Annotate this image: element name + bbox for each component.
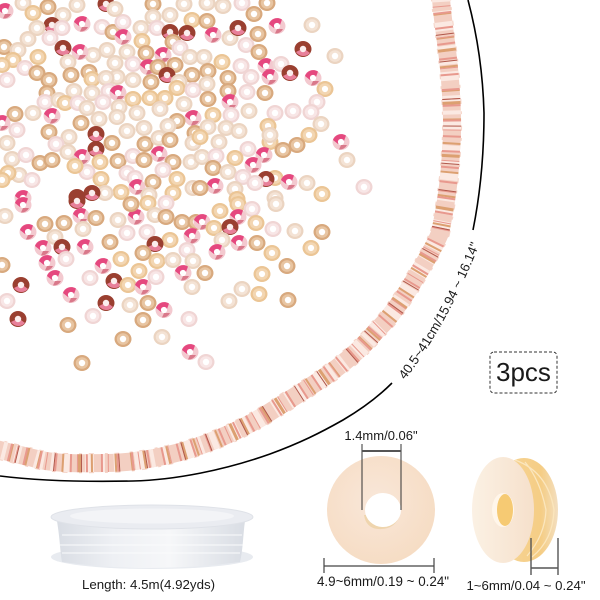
length arc line upper (468, 0, 484, 230)
hole size label: 1.4mm/0.06" (344, 428, 418, 443)
length label: 40.5~41cm/15.94 ~ 16.14" (400, 242, 477, 378)
elastic thread spool (51, 505, 253, 569)
quantity badge (490, 352, 557, 393)
bead front view with hole dimensions (327, 444, 435, 564)
outer diameter dimension (317, 558, 449, 589)
length arc line lower (0, 383, 392, 481)
heishi bead strand (0, 0, 452, 463)
bead side view with thickness dimension (472, 457, 558, 575)
thickness label: 1~6mm/0.04 ~ 0.24" (466, 578, 586, 593)
outer diameter dimension: 4.9~6mm/0.19 ~ 0.24" (317, 574, 449, 589)
quantity badge: 3pcs (496, 357, 551, 387)
spool length caption: Length: 4.5m(4.92yds) (82, 577, 215, 592)
scattered shell beads (0, 0, 372, 371)
